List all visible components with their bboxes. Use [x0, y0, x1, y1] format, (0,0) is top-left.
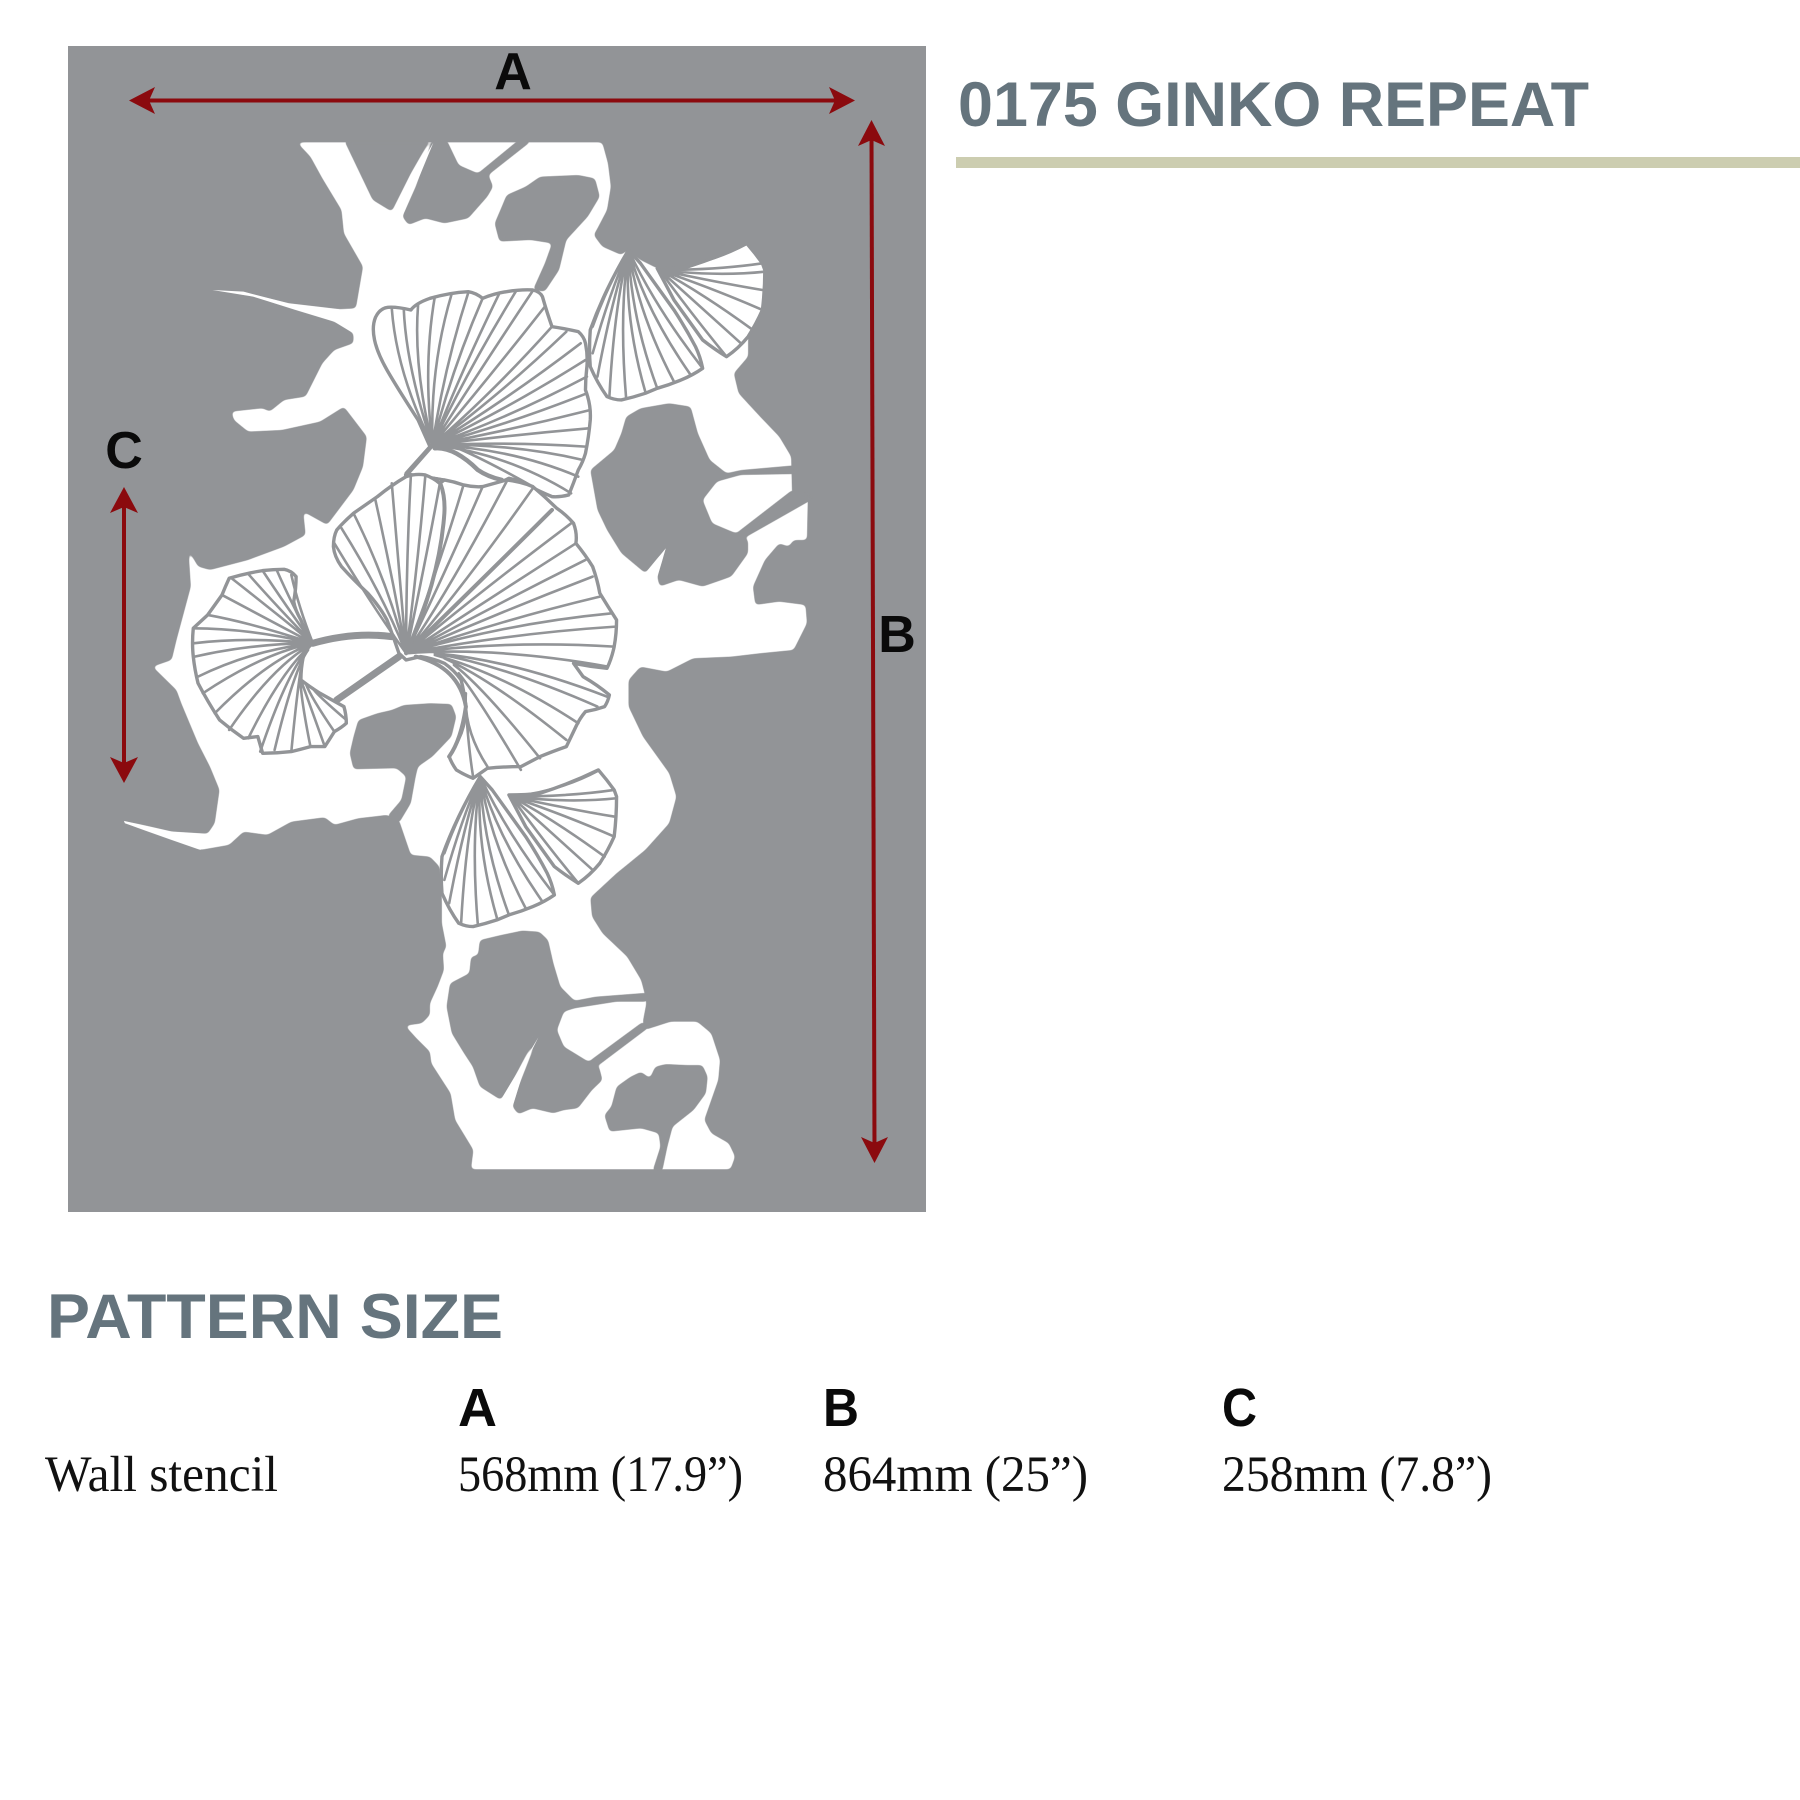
- white slivers between leaf silhouettes: [124, 143, 666, 1107]
- leaf: upper centre: [373, 290, 590, 497]
- row label: Wall stencil: [45, 1447, 278, 1503]
- leaf: large centre: [313, 474, 617, 778]
- column header B: B: [823, 1378, 859, 1438]
- petioles: [337, 657, 399, 700]
- dimension label A: A: [494, 43, 532, 101]
- title: 0175 GINKO REPEAT: [958, 70, 1589, 140]
- column header C: C: [1222, 1378, 1257, 1438]
- heading: pattern size: PATTERN SIZE: [47, 1282, 503, 1352]
- value C: 258mm (7.8”): [1222, 1447, 1492, 1503]
- dimension label B: B: [878, 606, 916, 664]
- stencil cut-out: white silhouette: [124, 142, 808, 1169]
- value B: 864mm (25”): [823, 1447, 1088, 1503]
- arrow C: [110, 487, 138, 783]
- panel: stencil pattern: [68, 46, 926, 1212]
- value A: 568mm (17.9”): [458, 1447, 743, 1503]
- leaf: lower right: [441, 770, 617, 927]
- leaf: left: [193, 569, 346, 753]
- arrow B: [858, 120, 888, 1163]
- leaf: upper right: [590, 243, 765, 400]
- ginkgo leaves: [193, 243, 765, 927]
- gray islands: leaf silhouettes: [344, 140, 813, 1172]
- column header A: A: [458, 1378, 497, 1438]
- arrow A: [129, 87, 855, 114]
- title rule: [956, 157, 1800, 168]
- dimension label C: C: [105, 422, 143, 480]
